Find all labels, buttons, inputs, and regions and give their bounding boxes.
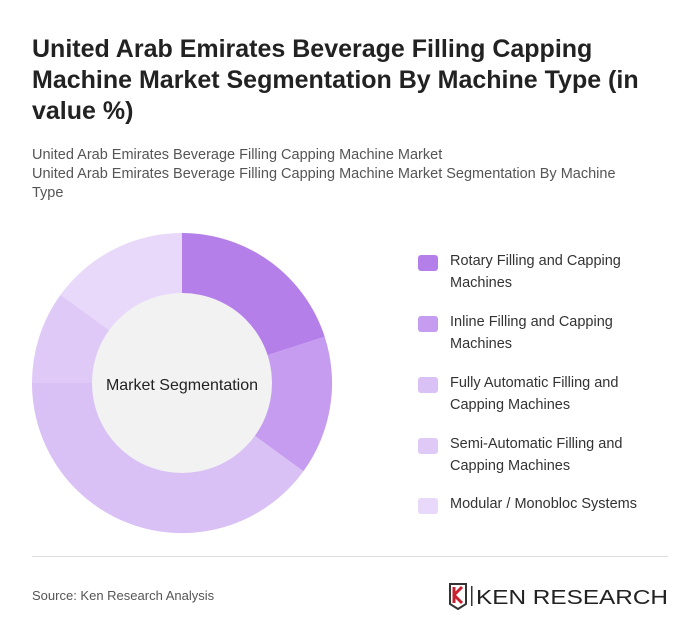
logo [449,583,668,610]
donut chart [32,233,332,534]
legend: Modular / Monobloc Systems [450,496,637,512]
center circle [92,293,272,473]
segment: rotary [182,233,325,356]
legend item: semi-automatic [418,436,622,474]
legend: Semi-Automatic Filling and [450,436,622,452]
legend: Rotary Filling and Capping [450,253,621,269]
legend item: inline [418,314,613,352]
segment: fully automatic [32,383,303,533]
segment: inline [252,337,332,471]
legend item: rotary [418,253,621,291]
legend item: modular [418,496,637,514]
legend: Inline Filling and Capping [450,314,613,330]
legend: Capping Machines [450,397,570,413]
legend [418,253,637,514]
legend: Capping Machines [450,458,570,474]
subtitle: United Arab Emirates Beverage Filling Capping Machine Market [32,147,442,163]
legend: Fully Automatic Filling and [450,375,618,391]
logo text: KEN RESEARCH [476,587,668,609]
legend: Machines [450,275,512,291]
subtitle: United Arab Emirates Beverage Filling Capping Machine Market Segmentation By Machine Type [32,166,616,201]
legend: Machines [450,336,512,352]
source: Source: Ken Research Analysis [32,588,214,603]
center label: Market Segmentation [106,377,258,394]
segment: semi-automatic [32,295,112,383]
segment: modular [61,233,182,332]
icon: K shield [450,584,466,609]
subtitle [32,147,616,201]
title: United Arab Emirates Beverage Filling Capping Machine Market Segmentation By Machine Type (in value %) [32,35,639,125]
legend item: fully automatic [418,375,618,413]
